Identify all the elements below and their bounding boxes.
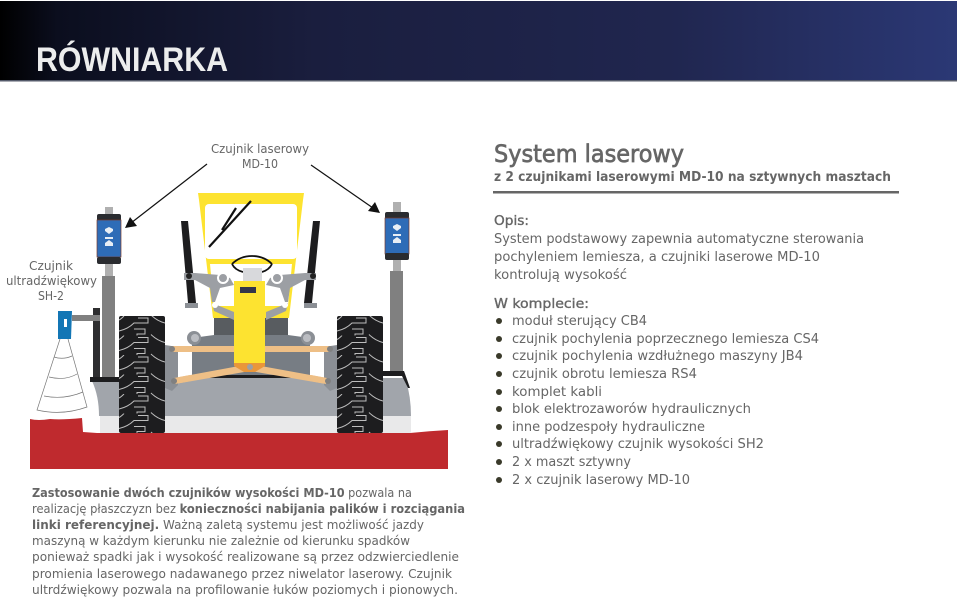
equipment list: blok elektrozaworów hydraulicznych — [512, 402, 751, 417]
ground — [30, 418, 448, 469]
equipment list: 2 x czujnik laserowy MD-10 — [512, 473, 690, 488]
equipment list: moduł sterujący CB4 — [512, 314, 647, 329]
description text: left: realizację płaszczyzn bez konieczności nabijania palików i rozciągania — [32, 501, 465, 516]
left mast with ultrasonic sensor — [37, 207, 115, 412]
ultrasonic cone — [37, 339, 87, 412]
label: laser sensor — [211, 142, 309, 171]
description text: left: linki referencyjnej. Ważną zaletą systemu jest możliwość jazdy — [32, 517, 425, 532]
label: laser sensor: Czujnik laserowy — [211, 142, 309, 156]
label: ultrasonic sensor — [6, 259, 97, 303]
gray arms — [184, 273, 316, 302]
equipment list: W komplecie: — [494, 297, 589, 312]
cab frame — [198, 193, 304, 318]
equipment list: ultradźwiękowy czujnik wysokości SH2 — [512, 437, 764, 452]
icon: left laser sensor — [97, 214, 121, 264]
equipment list: czujnik obrotu lemiesza RS4 — [512, 367, 697, 382]
label: laser sensor: MD-10 — [242, 157, 278, 171]
label: ultrasonic sensor: Czujnik — [29, 259, 73, 273]
heading: system laserowy — [493, 140, 899, 194]
central column — [234, 281, 265, 372]
icon: ultrasonic sensor — [58, 311, 72, 339]
description text: opis: Opis: — [494, 214, 529, 229]
right mast and laser sensor — [385, 202, 409, 371]
steering wheel — [232, 256, 272, 272]
description text: left: promienia laserowego nadawanego przez niwelator laserowy. Czujnik — [32, 566, 453, 581]
equipment list: czujnik pochylenia poprzecznego lemiesza CS4 — [512, 332, 819, 347]
description text: left: maszyną w każdym kierunku nie zależnie od kierunku spadków — [32, 533, 410, 548]
heading: system laserowy: z 2 czujnikami laserowymi MD-10 na sztywnych masztach — [494, 170, 891, 185]
equipment list: 2 x maszt sztywny — [512, 455, 631, 470]
description text: left: Zastosowanie dwóch czujników wysokości MD-10 pozwala na — [32, 485, 412, 500]
header banner — [0, 1, 957, 82]
description text: opis: System podstawowy zapewnia automatyczne sterowania — [494, 232, 864, 247]
description text: left: ultrdźwiękowy pozwala na profilowanie łuków poziomych i pionowych. — [32, 582, 458, 597]
tan linkage bars — [165, 345, 337, 391]
wipers — [209, 201, 251, 247]
arrow: to left laser sensor — [125, 164, 207, 228]
label: ultrasonic sensor: SH-2 — [38, 289, 64, 303]
description text: left — [32, 485, 465, 597]
body and cab — [181, 193, 320, 378]
blade — [90, 371, 411, 433]
graders diagram — [30, 193, 448, 469]
description text: opis: pochyleniem lemiesza, a czujniki laserowe MD-10 — [494, 250, 820, 265]
equipment list — [494, 297, 819, 488]
heading: system laserowy: System laserowy — [494, 140, 684, 168]
tall side bars — [181, 221, 320, 303]
label: ultrasonic sensor: ultradźwiękowy — [6, 274, 97, 288]
equipment list: komplet kabli — [512, 385, 602, 400]
title: RÓWNIARKA — [36, 41, 228, 79]
equipment list: inne podzespoły hydrauliczne — [512, 420, 705, 435]
description text: opis: kontrolują wysokość — [494, 268, 627, 283]
equipment list: czujnik pochylenia wzdłużnego maszyny JB4 — [512, 349, 803, 364]
arrow: to right laser sensor — [311, 165, 380, 213]
description text: left: ponieważ spadki jak i wysokość realizowane są przez odzwierciedlenie — [32, 549, 459, 564]
description text: opis — [494, 214, 864, 283]
tyre: left — [119, 316, 165, 433]
tyre: right — [337, 316, 383, 433]
